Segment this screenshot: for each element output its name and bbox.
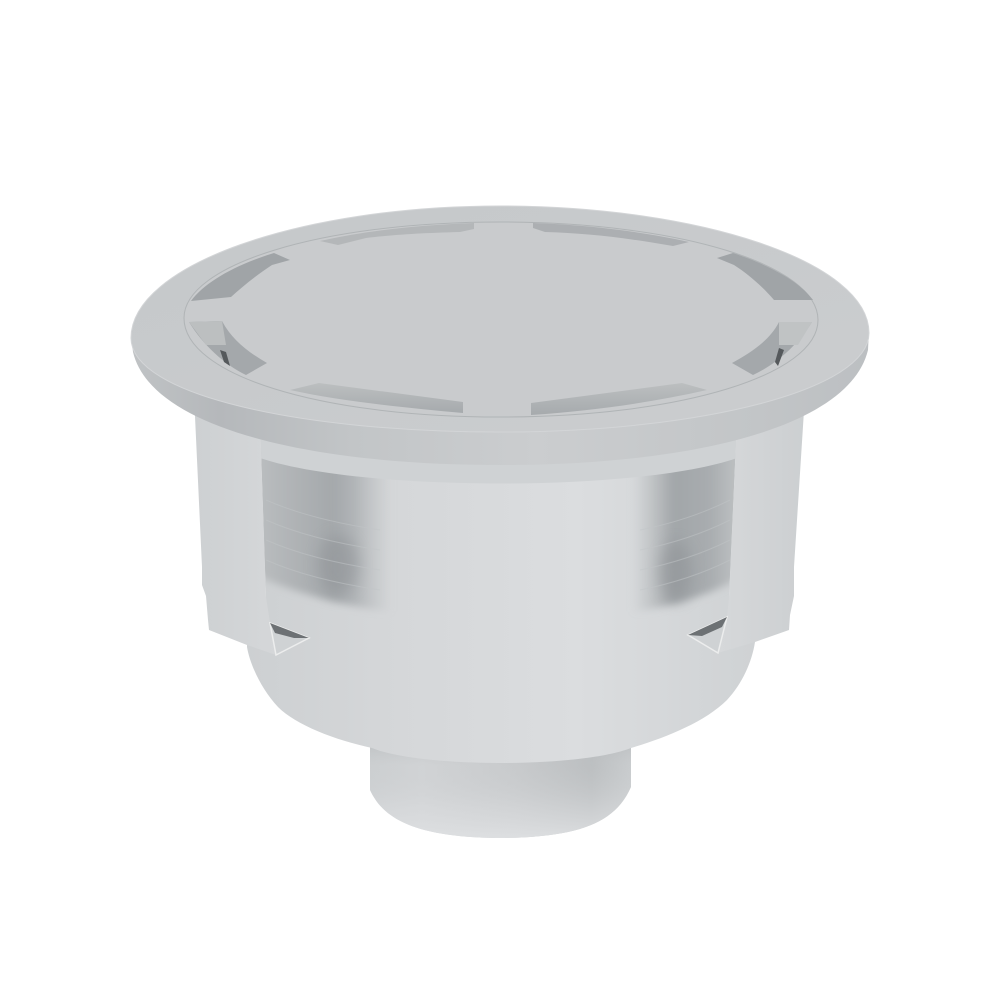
lower bowl xyxy=(247,630,755,763)
flange top surface xyxy=(131,206,869,432)
pocket: bottom left xyxy=(290,383,463,413)
pocket: top left xyxy=(320,223,474,245)
thread lines xyxy=(288,504,721,586)
pocket: bottom right xyxy=(531,383,707,415)
light collar under the flange xyxy=(261,440,736,484)
pocket: lower left xyxy=(189,321,267,375)
cylindrical threaded body xyxy=(260,440,736,630)
left bracket notch xyxy=(270,623,309,655)
right shaded band xyxy=(640,458,736,610)
right mounting bracket xyxy=(688,395,805,653)
flange rim side xyxy=(131,330,869,465)
cover plate and recessed pockets xyxy=(184,222,818,417)
right bracket notch xyxy=(688,617,727,653)
pocket: lower right xyxy=(732,322,812,375)
product illustration: round metal floor drain xyxy=(130,206,870,838)
left shaded band xyxy=(262,458,380,610)
pocket: top right xyxy=(533,223,689,246)
outlet pipe xyxy=(370,735,631,838)
cover disc xyxy=(184,222,818,417)
pocket: upper right xyxy=(717,253,813,300)
pocket: upper left xyxy=(191,253,290,301)
left mounting bracket xyxy=(194,395,309,655)
